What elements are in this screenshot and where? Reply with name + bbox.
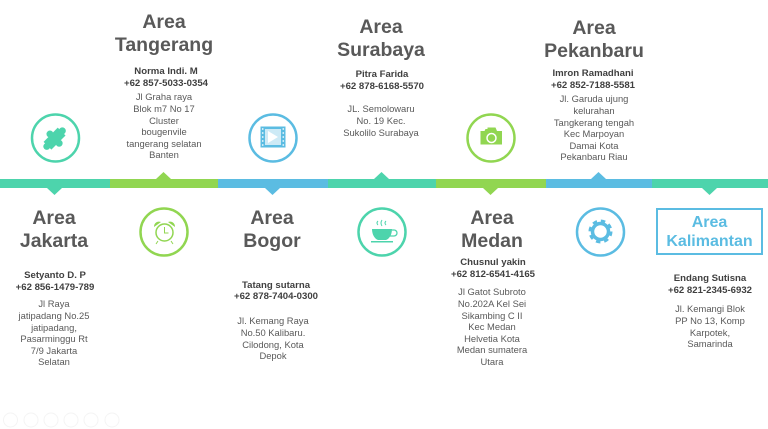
column: Area Surabaya: No. 19 Kec. bbox=[356, 115, 406, 126]
column: Area Tangerang: tangerang selatan bbox=[126, 138, 202, 149]
column: Area Kalimantan: Karpotek, bbox=[690, 327, 730, 338]
column: Area Jakarta: 7/9 Jakarta bbox=[31, 345, 77, 356]
heading box: Area Kalimantan: Kalimantan bbox=[666, 233, 753, 250]
column: Area Jakarta: Selatan bbox=[38, 356, 70, 367]
column: Area Surabaya: JL. Semolowaru bbox=[347, 103, 415, 114]
column: Area Medan: Medan bbox=[461, 230, 523, 252]
column: Area Medan: Sikambing C II bbox=[462, 310, 522, 321]
column: Area Tangerang: Area bbox=[142, 11, 186, 33]
column: Area Surabaya: Sukolilo Surabaya bbox=[343, 127, 419, 138]
icon: video play bbox=[250, 114, 296, 162]
column: Area Surabaya: Surabaya bbox=[337, 39, 425, 61]
column: Area Medan: Helvetia Kota bbox=[464, 333, 520, 344]
heading box: Area Kalimantan: Area bbox=[692, 214, 727, 231]
column: Area Pekanbaru: +62 852-7188-5581 bbox=[551, 80, 635, 91]
column: Area Tangerang: Tangerang bbox=[115, 34, 213, 56]
column: Area Bogor: Depok bbox=[259, 350, 287, 361]
column: Area Kalimantan: PP No 13, Komp bbox=[675, 315, 745, 326]
column: Area Jakarta: Jakarta bbox=[20, 230, 88, 252]
column: Area Tangerang: Norma Indi. M bbox=[134, 66, 198, 77]
column: Area Tangerang: Banten bbox=[149, 149, 179, 160]
column: Area Medan: +62 812-6541-4165 bbox=[451, 269, 535, 280]
column: Area Kalimantan: Jl. Kemangi Blok bbox=[675, 303, 745, 314]
column: Area Jakarta: Setyanto D. P bbox=[24, 270, 86, 281]
column: Area Kalimantan: Samarinda bbox=[687, 338, 733, 349]
column: Area Jakarta: jatipadang, bbox=[31, 322, 77, 333]
column: Area Pekanbaru: Pekanbaru Riau bbox=[560, 151, 628, 162]
column: Area Tangerang: Jl Graha raya bbox=[136, 91, 192, 102]
column: Area Tangerang: Blok m7 No 17 bbox=[133, 103, 195, 114]
column: Area Jakarta: Pasarminggu Rt bbox=[20, 333, 88, 344]
column: Area Bogor: Bogor bbox=[243, 230, 301, 252]
column: Area Tangerang bbox=[115, 11, 213, 160]
column: Area Pekanbaru: Area bbox=[572, 17, 616, 39]
column: Area Jakarta: Area bbox=[32, 207, 76, 229]
column: Area Medan: No.202A Kel Sei bbox=[458, 298, 526, 309]
column: Area Medan: Chusnul yakin bbox=[460, 257, 526, 268]
column: Area Pekanbaru: Tangkerang tengah bbox=[554, 117, 634, 128]
icon: coffee cup bbox=[358, 208, 406, 256]
column: Area Medan: Kec Medan bbox=[468, 321, 516, 332]
column: Area Tangerang: Cluster bbox=[149, 115, 179, 126]
column: Area Jakarta bbox=[16, 207, 94, 367]
column: Area Pekanbaru: Kec Marpoyan bbox=[564, 128, 624, 139]
column: Area Medan: Utara bbox=[481, 356, 503, 367]
column: Area Bogor: Area bbox=[250, 207, 294, 229]
column: Area Jakarta: +62 856-1479-789 bbox=[16, 282, 94, 293]
column: Area Kalimantan: +62 821-2345-6932 bbox=[668, 285, 752, 296]
column: Area Bogor: No.50 Kalibaru. bbox=[241, 327, 305, 338]
column: Area Kalimantan: Endang Sutisna bbox=[674, 273, 746, 284]
column: Area Medan bbox=[451, 207, 535, 367]
column: Area Pekanbaru: kelurahan bbox=[573, 105, 615, 116]
column: Area Pekanbaru bbox=[544, 17, 644, 162]
column: Area Pekanbaru: Pekanbaru bbox=[544, 40, 644, 62]
column: Area Pekanbaru: Imron Ramadhani bbox=[552, 68, 634, 79]
column: Area Medan: Area bbox=[470, 207, 514, 229]
column: Area Bogor bbox=[234, 207, 318, 361]
icon: puzzle piece bbox=[32, 114, 79, 162]
column: Area Kalimantan bbox=[656, 208, 763, 349]
column: Area Bogor: Tatang sutarna bbox=[242, 280, 310, 290]
icon: camera bbox=[468, 114, 514, 162]
column: Area Jakarta: jatipadang No.25 bbox=[19, 310, 89, 321]
column: Area Jakarta: Jl Raya bbox=[38, 298, 70, 309]
column: Area Bogor: Cilodong, Kota bbox=[242, 339, 304, 350]
toolbar controls bbox=[4, 413, 119, 427]
column: Area Surabaya: +62 878-6168-5570 bbox=[340, 81, 424, 92]
icon: gear bbox=[577, 208, 624, 256]
icon: alarm clock bbox=[140, 208, 188, 256]
column: Area Medan: Medan sumatera bbox=[457, 344, 527, 355]
heading box: Area Kalimantan bbox=[656, 208, 763, 255]
column: Area Pekanbaru: Jl. Garuda ujung bbox=[560, 93, 628, 104]
column: Area Surabaya: Pitra Farida bbox=[356, 69, 408, 80]
column: Area Bogor: +62 878-7404-0300 bbox=[234, 291, 318, 302]
column: Area Medan: Jl Gatot Subroto bbox=[458, 286, 526, 297]
timeline bar bbox=[0, 172, 768, 195]
column: Area Tangerang: +62 857-5033-0354 bbox=[124, 78, 208, 89]
column: Area Tangerang: bougenvile bbox=[141, 126, 187, 137]
column: Area Pekanbaru: Damai Kota bbox=[570, 140, 618, 151]
column: Area Surabaya: Area bbox=[359, 16, 403, 38]
column: Area Surabaya bbox=[337, 16, 425, 138]
column: Area Bogor: Jl. Kemang Raya bbox=[237, 315, 309, 326]
